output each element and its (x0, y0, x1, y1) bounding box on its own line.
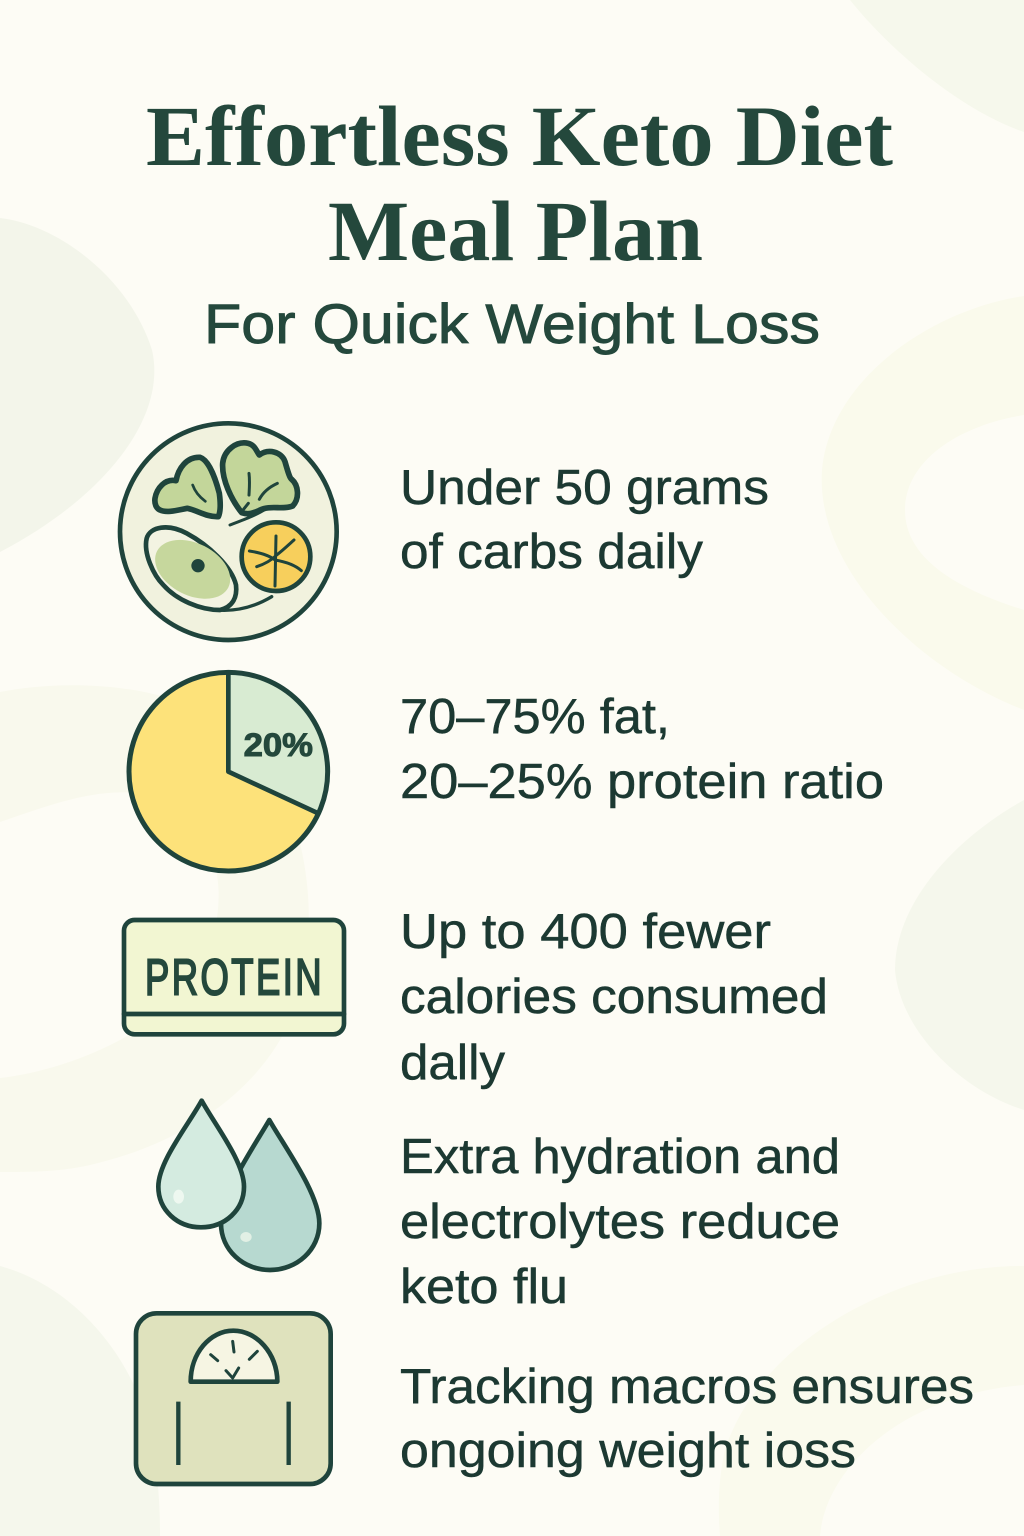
text: calories (400, 905, 828, 1090)
title: Effortless Keto Diet (146, 88, 893, 184)
back drop (221, 1120, 319, 1270)
text: carbs: of carbs daily (400, 525, 704, 579)
icon: keto plate (120, 423, 337, 640)
subtitle: For Quick Weight Loss (204, 292, 820, 355)
text: tracking (400, 1360, 974, 1478)
text: hydration (400, 1130, 840, 1314)
text: hydration: electrolytes reduce (400, 1195, 840, 1249)
text: macro ratio (400, 690, 884, 809)
pie outline (228, 672, 318, 813)
avocado tail (217, 597, 272, 610)
front drop (158, 1101, 244, 1227)
scale dial (191, 1331, 277, 1382)
text: carbs (400, 461, 769, 579)
icon: protein bar (124, 920, 344, 1034)
text: tracking: Tracking macros ensures (400, 1360, 974, 1414)
dial ticks (211, 1341, 257, 1378)
text: carbs: Under 50 grams (400, 461, 769, 515)
avocado (146, 527, 236, 610)
scale feet lines (178, 1402, 289, 1465)
left leaf (155, 457, 220, 517)
lemon segments (249, 536, 301, 586)
avocado flesh (145, 528, 240, 611)
avocado seed (191, 559, 205, 572)
protein slice (228, 672, 327, 813)
text: calories: dally (400, 1036, 506, 1090)
left leaf vein (193, 485, 205, 501)
icon: bathroom scale (136, 1313, 331, 1484)
title (146, 88, 893, 279)
text: calories: Up to 400 fewer (400, 905, 771, 959)
title: Meal Plan (328, 183, 703, 279)
right leaf (223, 443, 297, 514)
text: macro ratio: 70–75% fat, (400, 690, 670, 744)
fat slice (129, 672, 328, 871)
right leaf veins and stem (230, 473, 277, 525)
protein label: PROTEIN (145, 950, 322, 1006)
lemon (242, 522, 310, 591)
text: macro ratio: 20–25% protein ratio (400, 755, 884, 809)
text: hydration: Extra hydration and (400, 1130, 840, 1184)
text: tracking: ongoing weight ioss (400, 1424, 856, 1478)
text: hydration: keto flu (400, 1260, 568, 1314)
icon: water drops (158, 1101, 319, 1270)
text: calories: calories consumed (400, 970, 828, 1024)
icon: macro pie chart (129, 672, 328, 871)
percent label: 20% (244, 727, 313, 763)
